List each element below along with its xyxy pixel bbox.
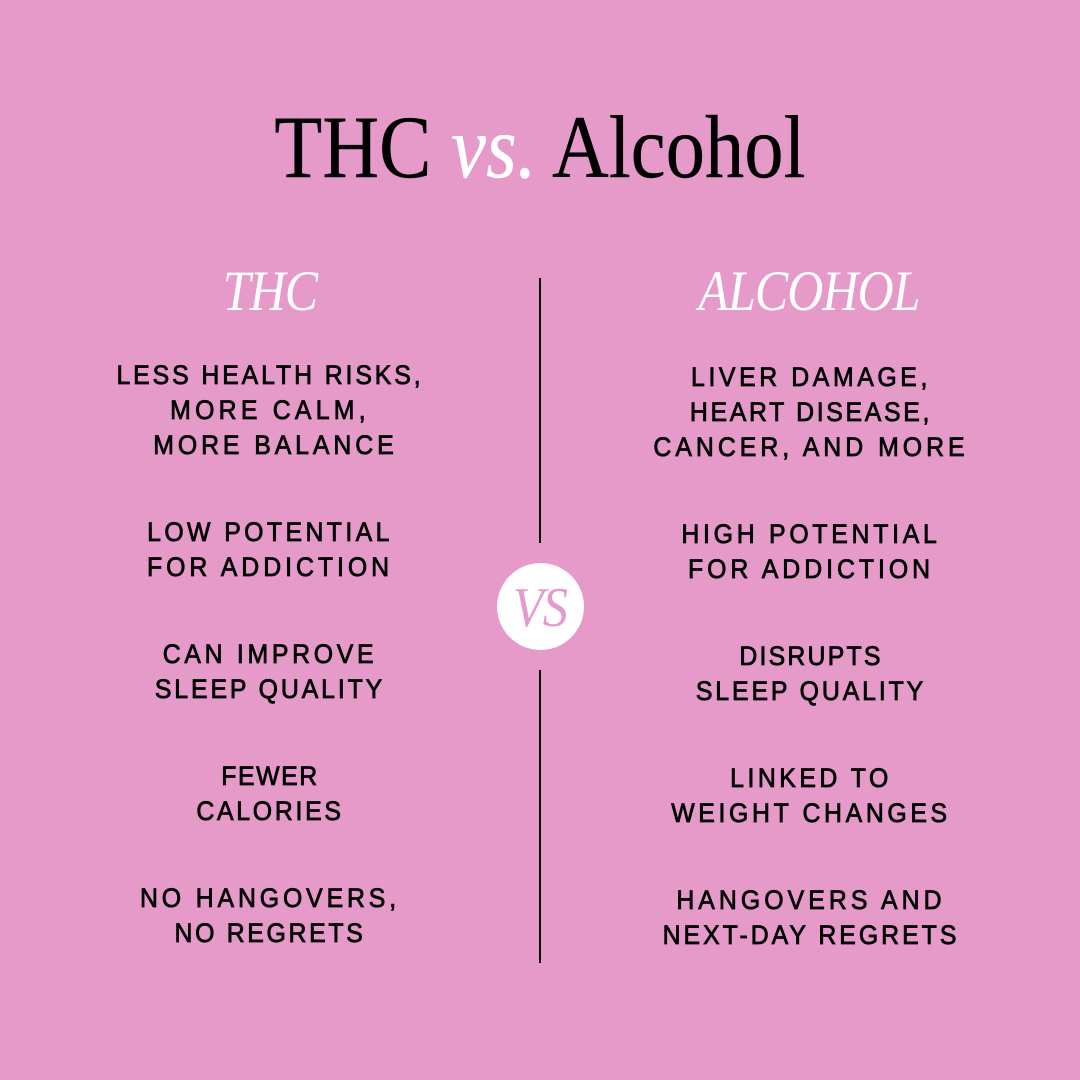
Alcohol item 3: SLEEP QUALITY — [696, 676, 926, 706]
THC item 1: MORE BALANCE — [153, 430, 398, 460]
THC item 4: FEWER — [221, 761, 319, 791]
Alcohol item 2: HIGH POTENTIAL — [681, 519, 941, 549]
heading: Alcohol column: ALCOHOL — [698, 260, 920, 323]
Alcohol item 4: WEIGHT CHANGES — [671, 798, 951, 828]
Alcohol item 1: LIVER DAMAGE, — [691, 362, 931, 392]
THC item 1: MORE CALM, — [170, 395, 370, 425]
divider: upper — [539, 278, 541, 543]
Alcohol item 1 — [653, 362, 969, 462]
heading: THC column: THC — [223, 260, 317, 323]
title: THC vs. Alcohol — [274, 99, 806, 197]
divider: lower — [539, 670, 541, 963]
badge: VS — [497, 563, 584, 650]
Alcohol item 5 — [663, 885, 959, 950]
Alcohol item 5: HANGOVERS AND — [676, 885, 946, 915]
THC item 4: CALORIES — [196, 796, 344, 826]
THC item 2: LOW POTENTIAL — [147, 517, 393, 547]
THC item 3: CAN IMPROVE — [163, 639, 377, 669]
Alcohol item 3: DISRUPTS — [739, 641, 883, 671]
Alcohol item 2 — [681, 519, 941, 584]
THC item 3 — [155, 639, 385, 704]
Alcohol item 3 — [696, 641, 926, 706]
THC item 1 — [116, 360, 424, 460]
Alcohol item 4: LINKED TO — [730, 763, 892, 793]
THC item 5 — [140, 883, 400, 948]
Alcohol item 1: HEART DISEASE, — [690, 397, 932, 427]
THC item 1: LESS HEALTH RISKS, — [116, 360, 424, 390]
THC item 3: SLEEP QUALITY — [155, 674, 385, 704]
THC item 2: FOR ADDICTION — [147, 552, 393, 582]
Alcohol item 2: FOR ADDICTION — [688, 554, 934, 584]
THC item 2 — [147, 517, 393, 582]
THC item 5: NO HANGOVERS, — [140, 883, 400, 913]
Alcohol item 5: NEXT-DAY REGRETS — [663, 920, 959, 950]
Alcohol item 1: CANCER, AND MORE — [653, 432, 969, 462]
THC item 4 — [196, 761, 344, 826]
Alcohol item 4 — [670, 763, 951, 828]
badge: VS: VS — [513, 577, 567, 639]
THC item 5: NO REGRETS — [175, 918, 365, 948]
